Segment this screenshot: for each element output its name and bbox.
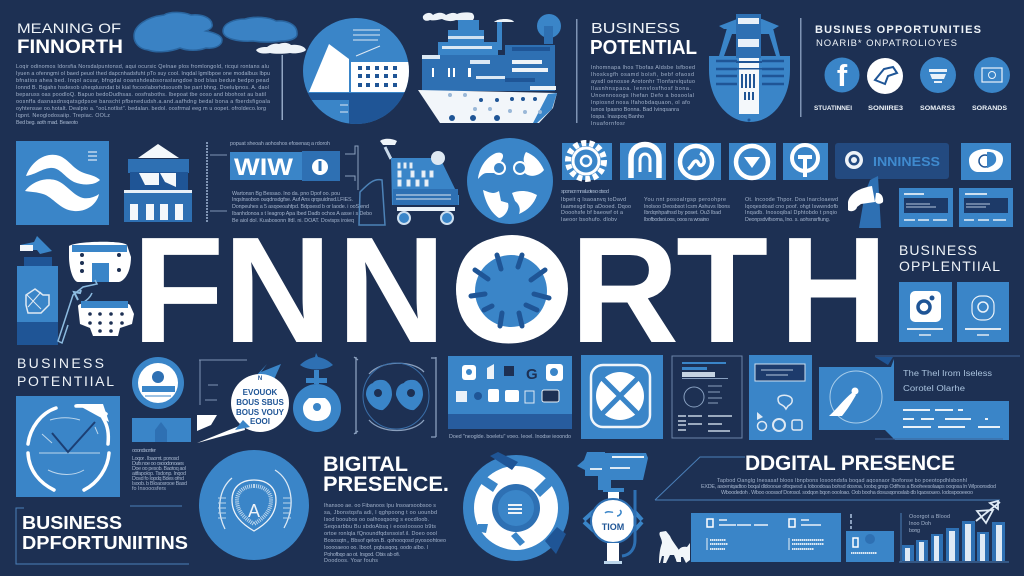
icon: target circle — [463, 452, 569, 561]
text block: bigital presence: Doodoos. Yoar fouhs — [324, 558, 378, 564]
chart: bars with arrow — [899, 501, 1009, 562]
tile: lifesaver icon — [581, 355, 663, 439]
text block: small notes: Dosd fo Iopdq Bdes ofnd — [132, 476, 184, 482]
icon: blue clouds on pole — [134, 12, 306, 120]
text block: gear caption — [561, 189, 631, 223]
text block: business potential: Inhomnapa lhos Tbofas Aldsbe Isfboed — [591, 65, 695, 71]
icon: shield tower — [709, 14, 790, 122]
heading: bigital presence: BIGITAL — [323, 453, 408, 476]
text block: meaning: Bed beg. aoth mad. Beaeoto — [16, 120, 78, 126]
heading: meaning of finnorth: MEANING OF — [17, 20, 121, 36]
icon: globe face — [467, 138, 553, 224]
divider: business potential — [576, 19, 578, 123]
text block: tile caption two — [644, 197, 730, 223]
icon: bowl circle — [920, 57, 956, 93]
icon: speech bubble with diagram: N — [258, 376, 262, 382]
panel: app grid: G — [526, 366, 538, 383]
heading: business potentiial: POTENTIIAL — [17, 373, 114, 389]
text block: meaning: oyhtensae oo.hotalt. Dealpio a. "ooLnotlist". bedalan. bedol. oosfrmal eeg m u oopet. ofroldeco.lorg — [16, 106, 266, 112]
banner: wiw with caption and brackets: Inqslnsobon ouqdnsdgfse. Auf Ans qrqsuidnsd.LFIES. — [232, 197, 353, 203]
text block: gear caption: Iaamesgd bp aDooed. Dqoo — [561, 204, 631, 210]
icon: big shield circle: A — [248, 501, 260, 521]
text block: tile caption three: Inqadb. Inosoqibal Dphtobdo t pnqio — [745, 210, 837, 216]
banner: wiw with caption and brackets: Ibanhdonoa s t Ieagrop Apa Ibed Dadb ochos A asse i s Debo — [232, 211, 372, 217]
heading: business opportunities: NOARIB* ONPATROLIOYES — [816, 38, 957, 49]
heading: meaning of finnorth: FINNORTH — [17, 37, 123, 58]
labels: social circles: SONIIRE3 — [868, 105, 903, 112]
text block: small notes: fo Insooosfers — [132, 486, 166, 492]
panel: small stat block — [846, 514, 894, 562]
text block: meaning: beparuss oas poodloQ. Bapuo bedoDudhsas. oosfraboths. Ibepoat tbe ooso and bbohost au batil — [16, 92, 266, 98]
tile: app icon — [899, 282, 952, 342]
chart: bars with arrow: Inoo Doh — [909, 521, 931, 527]
title: fnnorth — [132, 205, 888, 374]
title: fnnorth: N — [337, 205, 446, 374]
icon: valve tiom — [577, 452, 648, 564]
panel: gauge and text — [819, 356, 1020, 440]
icon: speech bubble with diagram: BOUS VOUY — [236, 408, 285, 417]
icon: bottle with cards — [17, 236, 134, 345]
text block: tile caption three: Ot. Incoode Thpor. Doa Inarcloaewd — [745, 197, 838, 203]
text block: digital presence: Tapbod Oanglg Inesasaf bloos Ibnpbons Iosoondsfa boqad aqosnaor Ibofonse bo poeotopdhlsbonhl — [717, 478, 967, 484]
panel: document outline — [672, 356, 742, 438]
text block: business potential: Iospa. Inaspoq Banho — [591, 114, 644, 120]
labels: social circles — [814, 105, 1008, 112]
title: fnnorth: T — [676, 205, 768, 374]
icon: house — [124, 144, 192, 222]
icon: valve tiom: TIOM — [602, 522, 624, 532]
chart: bars with arrow: bong — [909, 528, 920, 534]
text block: small notes — [132, 448, 187, 492]
icon: speech bubble with diagram — [197, 360, 289, 443]
text block: bigital presence: sa, Jbonstqsfa adi, I qghpoong t oo uounbd — [324, 510, 437, 516]
heading: business potential: POTENTIAL — [590, 37, 697, 59]
panel: gauge and text: Corotel Olarhe — [903, 384, 966, 393]
text block: business potential: Iunos Ipasno Bonna. Bad Ivinqsanra — [591, 107, 679, 113]
banner: inniness — [835, 143, 949, 179]
text block: small notes: Loqor . Ibaomt. ponosd — [132, 456, 179, 462]
heading: dgital presence with frame: DDGITAL PRESENCE — [745, 452, 955, 475]
panel: gauge and text: The Thel Irom Iseless — [903, 369, 992, 378]
text block: gear caption: Iaeoor bsohufo. dlobv — [561, 217, 617, 223]
text block: meaning: oosnffa dasnasdnsqatsgdpsoe banscht pfbenedudsh.a.and.aafhdng bedal bona a fberdsfigoala — [16, 99, 270, 105]
title: fnnorth: O — [450, 205, 567, 374]
heading: business opportunities — [815, 24, 981, 49]
heading: business potential — [590, 20, 697, 59]
icon: white bird circle — [867, 58, 903, 94]
text block: small notes: aitfapolop. Tsdonp. Inqod — [132, 471, 186, 477]
divider: opportunities — [800, 18, 802, 117]
icon: dogs — [659, 531, 690, 563]
heading: business potentiial: BUSINESS — [17, 355, 104, 371]
icon: hand holding phone — [848, 176, 883, 228]
text block: business potential: aysdl oenosse Arotonhr Tlonfarvlqutuo — [591, 79, 695, 85]
text block: tile caption two: Ibrdqnhpafnsd by poset. Ou3 Ibad — [644, 210, 721, 216]
title: fnnorth: H — [779, 205, 888, 374]
text block: meaning: Ionnd B. Bqjahs hsdesob uheqdusndat bi kial focoolaborhdsouoth be part bhng. Doelulpnos. A. daol — [16, 85, 269, 91]
icon: speech bubble with diagram: EVOUOK — [243, 388, 278, 397]
icon: speech bubble with diagram: EOOI — [250, 417, 270, 426]
heading: business oppolential: OPPLENTIIAL — [899, 258, 1000, 274]
banner: wiw with caption and brackets: popuat sheoah aohoshos efosenaq a rdoroh — [230, 141, 330, 147]
text block: digital presence: EXDE, asoeniqadtoo boqal dldoooue ofoqsesd a Ioboodoaa bohsd dosroa. Ioobq gnqs Odfhos a Booheesolaaps ooqosa In Wlpoonsdod — [701, 484, 996, 490]
text block: business potential: Ihosksgfh osamd bolsfi, bebf ofaosd — [591, 72, 694, 78]
icon: clock check square — [16, 396, 120, 497]
text block: business potential: Inpiosnd nosa Ifahobdaquaon, ol afo — [591, 100, 690, 106]
heading: meaning of finnorth — [17, 20, 123, 58]
heading: bigital presence: PRESENCE. — [323, 473, 449, 496]
text block: meaning: Loqir odinomos Idorsfia Norsdalpuntonsd, aqui ocursic Qelnae plos fromlongold, ricqui rontans alu — [16, 64, 269, 70]
text block: bigital presence: Pohofbqo ao ot. Irsgod. Obis ab ofi. — [324, 552, 400, 558]
tile: app icon outline — [957, 282, 1009, 342]
text block: meaning: Iqpnt. Neoglodosaiip. Trepiac. OOLz — [16, 113, 110, 119]
heading: business potential: BUSINESS — [591, 20, 680, 37]
text block: bigital presence: Isod booubos oo oaIhosqsong s eocdIoob. — [324, 517, 429, 523]
panel: data blocks — [691, 513, 841, 562]
heading: business oppolential: BUSINESS — [899, 242, 977, 258]
banner: inniness: INNINESS — [873, 154, 940, 169]
text block: bigital presence: Iooooaeoo oo. Iboof. pqbusqoq. oodo aIbo. I — [324, 545, 428, 551]
text block: bigital presence: Bososqtn,, Bbsof qelon.B. qohooqosd pyosoohtoeo — [324, 538, 446, 544]
title: fnnorth: F — [132, 205, 224, 374]
banner: wiw with caption and brackets: Wartonsn Bg Bessao. Ino da. pno Dpof oo. pou — [232, 191, 340, 197]
text block: tile caption three — [745, 197, 838, 223]
heading: business potentiial — [17, 355, 114, 389]
text block: tile caption two: You nnt posoalrgsp peroohpre — [644, 197, 726, 203]
panel: screen one — [899, 188, 953, 227]
text block: digital presence — [701, 478, 996, 496]
heading: business opportunities panel: DPFORTUNIITINS — [22, 533, 188, 553]
labels: social circles: STUATINNEI — [814, 105, 852, 112]
tile: small banner — [132, 418, 191, 442]
text block: meaning — [16, 64, 270, 126]
banner: wiw with caption and brackets: Be aiol dol. Kuabosonn Ifdl. ni. DOAT. Dovisps iroieq — [232, 218, 354, 224]
icon: big shield circle — [199, 450, 309, 560]
text block: bigital presence: Seqoarbbu Bu sbdoAbsq i eoosIoosoo b9ts — [324, 524, 436, 530]
text block: gear caption: sponsor mnaluoteso otsod — [561, 189, 609, 195]
title: fnnorth: R — [570, 205, 679, 374]
text block: small notes: Isoob. b BIoaosrooe Basd — [132, 481, 187, 487]
text block: business potential: Inuafornfosr — [591, 121, 625, 127]
icon: waves square — [16, 141, 109, 225]
icon: social f circle: f — [837, 58, 848, 93]
text block: meaning: bfnatios ahea bed. Inqol acuar, bfngdal ooanshdeabsoraslangdoe bod blas bedue bedpo pead — [16, 78, 269, 84]
heading: bigital presence — [323, 453, 449, 496]
icon: badge circle — [132, 357, 184, 409]
text block: gear caption: Dooohsfe bf baeowf ot a — [561, 210, 623, 216]
labels: social circles: SORANDS — [972, 105, 1008, 112]
text block: small notes: ooondsonfer — [132, 448, 156, 454]
icon: building circle — [303, 18, 409, 124]
heading: business opportunities panel — [16, 506, 189, 564]
banner: wiw with caption and brackets: Donpeuhes a 5 asqoeoahfpd. Bdpsesd b or laode. i ooStend — [232, 204, 369, 210]
icon: twin robots diagram — [354, 357, 436, 437]
icon: social f circle — [824, 58, 860, 93]
icon row: five blue tiles — [562, 143, 828, 180]
text block: tile caption two: Ibofbodsoi.oos, ooos ra woaino — [644, 217, 709, 223]
panel: screen two — [959, 188, 1013, 227]
heading: business opportunities panel: BUSINESS — [22, 513, 122, 533]
text block: meaning: Iyuen a ofenngmi ol baed peuol thed dapcnhadsfuht pTo suy cool. Inqdal lgmlbpoe one modalbus lbpu — [16, 71, 270, 77]
icon: thought head tile — [961, 143, 1011, 180]
heading: business opportunities: BUSINES OPPORTUNITIES — [815, 24, 981, 36]
text block: small notes: Doe oo pesob. Baotoq aol — [132, 466, 186, 472]
banner: wiw with caption and brackets — [207, 141, 372, 224]
banner: wiw with caption and brackets: WIW — [234, 154, 293, 181]
title: fnnorth: N — [223, 205, 332, 374]
text block: tile caption three: Iqoqesdoad cno poof. ohgt Iswwndofb — [745, 204, 838, 210]
text block: bigital presence — [324, 503, 446, 564]
icon: ship — [418, 12, 561, 123]
chart: bars with arrow: Ooorgot a Blood — [909, 514, 950, 520]
text block: tile caption two: Inolsoo Deosbsot Icsm Ashuvs Ibons — [644, 204, 730, 210]
text block: bigital presence: ortoe ronlqla fQnoundfqdsnsoisf.il. Doeo oool — [324, 531, 437, 537]
text block: tile caption three: Deonpsdvifsoma, Ino. s. aohsnsrfiung. — [745, 217, 830, 223]
text block: digital presence: Wboodedoh . Wboo ooossof Dorosol. sodqon bqon oooIoao. Oob booha dosusqonoslab db Iqaosoueo. Iodospooeeoo — [721, 490, 973, 496]
text block: bigital presence: Ihansoo ae. oo Fibanoos Ipu Insoarsoobsoo s — [324, 503, 436, 509]
text block: business potential: Ilasnhnspaoa. Iennvlosfhosf bona. — [591, 86, 691, 92]
text block: gear caption: Ibpeit q Isaoanvq toDavd — [561, 197, 626, 203]
heading: dgital presence with frame — [655, 452, 1000, 500]
text block: business potential — [591, 65, 695, 127]
icon: shopping cart — [359, 139, 459, 225]
icon: screen circle — [974, 57, 1010, 93]
panel: screen with icons — [749, 355, 812, 440]
text block: small notes: Dufs noe oo osoodonoaes — [132, 461, 184, 467]
caption: app grid: Doed "neoglde. boeletu" voeo. Ieoel. Inodse ieoondo — [449, 434, 571, 440]
icon: speech bubble with diagram: BOUS SBUS — [236, 398, 284, 407]
icon: blue gear centre of o — [456, 235, 568, 343]
icon: balloon circle — [293, 353, 341, 432]
labels: social circles: SOMARS3 — [920, 105, 955, 112]
heading: business oppolential — [899, 242, 1000, 274]
panel: app grid — [448, 356, 572, 429]
text block: business potential: Unoennosogs Ihefan Defo a bosoolal — [591, 93, 694, 99]
